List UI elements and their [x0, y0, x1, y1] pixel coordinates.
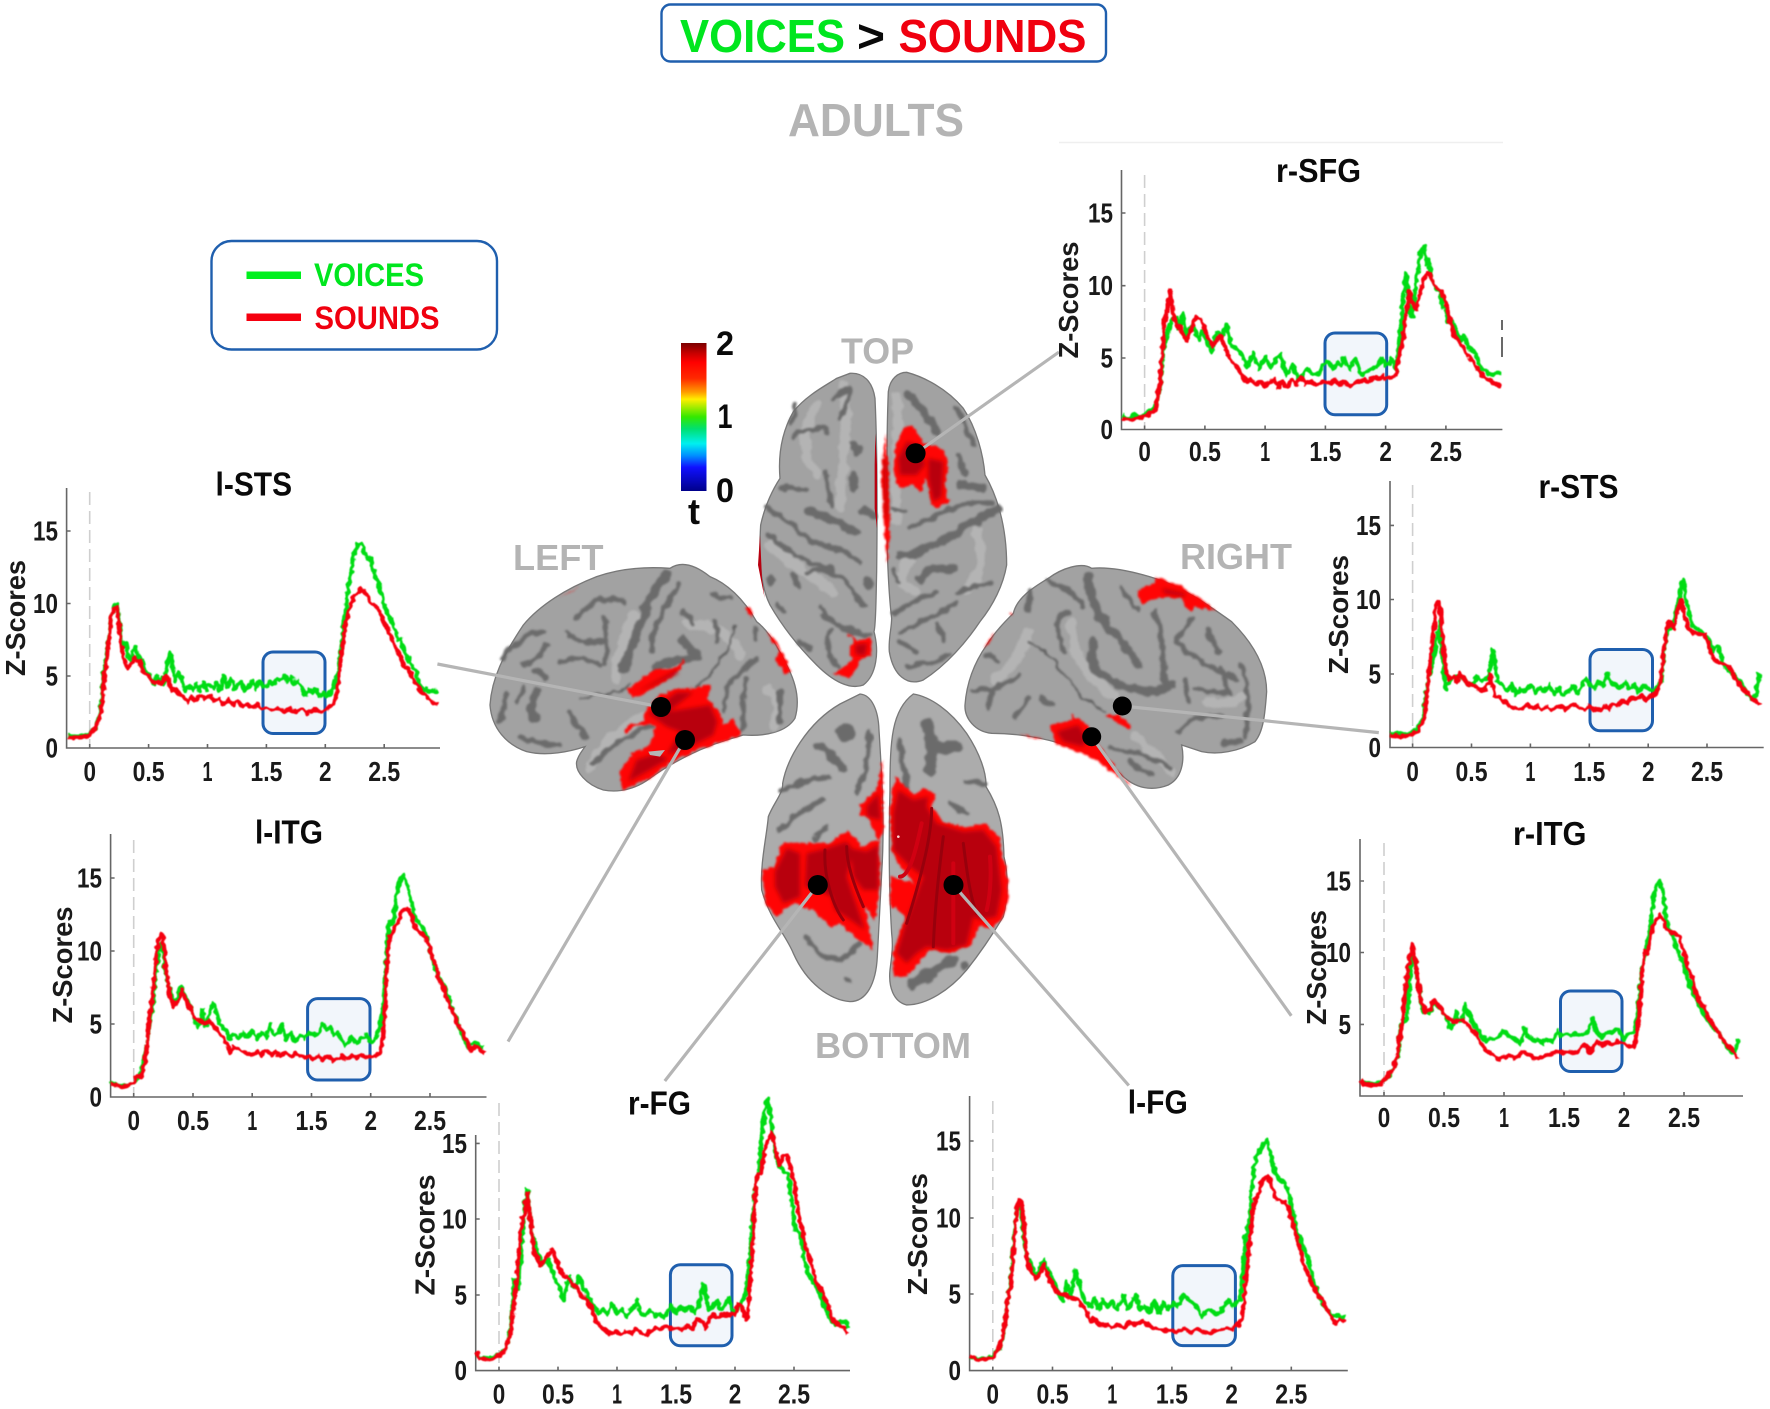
- chart: l-FG: [902, 1084, 1348, 1409]
- axes: [111, 834, 486, 1097]
- tick labels: 1.5: [660, 1379, 692, 1409]
- tick labels: 0: [1368, 732, 1381, 763]
- colour bar: t scale: 2: [716, 325, 734, 363]
- left hemisphere, bottom view: [761, 694, 883, 1002]
- highlight window: [1325, 333, 1387, 415]
- tick labels: 5: [948, 1278, 961, 1310]
- tick labels: 2: [319, 756, 332, 787]
- chart: l-STS: [0, 466, 440, 787]
- tick labels: 5: [1338, 1009, 1351, 1040]
- region markers: [651, 443, 1132, 895]
- tick labels: 1: [1260, 436, 1270, 467]
- colour bar: t scale: [681, 325, 734, 532]
- traces: [1122, 246, 1501, 419]
- axes: [67, 488, 440, 748]
- brain: bottom view: [761, 694, 1008, 1005]
- tick labels: 15: [33, 516, 58, 546]
- tick labels: 0: [46, 732, 58, 764]
- highlight window: [1173, 1266, 1235, 1346]
- tick labels: 15: [77, 862, 102, 894]
- title box: voices > sounds: VOICES: [680, 10, 845, 62]
- tick labels: 2: [729, 1379, 741, 1409]
- y axis label: Z-Scores: [1323, 555, 1354, 674]
- axes: [1390, 481, 1764, 748]
- colour bar: t scale: 0: [716, 472, 734, 510]
- title box: voices > sounds: [662, 4, 1106, 62]
- tick labels: 0: [1100, 414, 1113, 445]
- title box: voices > sounds: >: [857, 10, 885, 62]
- tick labels: 2: [1642, 756, 1654, 787]
- tick labels: 2.5: [1691, 756, 1723, 787]
- highlight window: [263, 652, 325, 734]
- traces: [1361, 880, 1738, 1085]
- legend: [212, 241, 497, 350]
- right hemisphere, bottom view: [889, 694, 1008, 1005]
- legend: SOUNDS: [314, 300, 440, 336]
- chart title: r-ITG: [1513, 815, 1586, 852]
- y axis label: Z-Scores: [1301, 910, 1332, 1025]
- tick labels: 10: [1356, 584, 1381, 615]
- tick labels: [77, 862, 446, 1136]
- tick labels: [33, 516, 400, 787]
- tick labels: [442, 1128, 810, 1409]
- tick labels: 15: [442, 1128, 467, 1159]
- tick labels: 2: [1225, 1379, 1238, 1409]
- title box: voices > sounds: SOUNDS: [898, 10, 1086, 62]
- tick labels: 1.5: [296, 1105, 328, 1136]
- tick labels: 0: [127, 1105, 140, 1136]
- chart: r-ITG: [1301, 815, 1743, 1133]
- colour bar: t scale: t: [688, 491, 700, 532]
- label: left: LEFT: [513, 537, 604, 578]
- label: bottom: BOTTOM: [815, 1025, 971, 1066]
- leader lines: [437, 352, 1379, 1086]
- tick labels: 1: [202, 756, 212, 787]
- tick labels: 0: [493, 1379, 505, 1409]
- tick labels: 0: [1378, 1102, 1390, 1133]
- traces: [111, 875, 484, 1087]
- tick labels: [936, 1126, 1307, 1409]
- brain: left lateral view: [490, 565, 797, 791]
- left hemisphere, top view: [758, 373, 877, 686]
- tick labels: 2.5: [1668, 1102, 1700, 1133]
- tick labels: 1: [1499, 1102, 1509, 1133]
- tick labels: 1: [1107, 1379, 1117, 1409]
- tick labels: 2: [1379, 436, 1392, 467]
- tick labels: 0: [1406, 756, 1419, 787]
- tick labels: 10: [1088, 270, 1113, 301]
- y axis label: Z-Scores: [410, 1174, 440, 1296]
- tick labels: 0: [454, 1355, 467, 1386]
- tick labels: 10: [77, 936, 102, 966]
- tick labels: 15: [1326, 866, 1351, 896]
- tick labels: 1.5: [1573, 756, 1605, 787]
- chart title: l-FG: [1128, 1084, 1188, 1121]
- chart title: r-STS: [1538, 468, 1618, 505]
- brain: top view: [758, 372, 1007, 686]
- chart: r-SFG: [1053, 142, 1503, 467]
- axes: [1122, 170, 1502, 430]
- y axis label: Z-Scores: [1053, 242, 1084, 358]
- tick labels: 5: [454, 1280, 467, 1310]
- traces: [970, 1141, 1345, 1360]
- traces: [1390, 579, 1760, 737]
- axes: [1360, 839, 1743, 1096]
- traces: [477, 1098, 848, 1360]
- tick labels: 10: [33, 588, 58, 619]
- tick labels: 10: [1326, 937, 1351, 968]
- chart: r-STS: [1323, 468, 1764, 787]
- y axis label: Z-Scores: [902, 1173, 933, 1295]
- tick labels: 1.5: [1156, 1379, 1188, 1409]
- tick labels: 0: [948, 1355, 961, 1386]
- tick labels: 5: [90, 1008, 102, 1040]
- tick labels: 0.5: [1456, 756, 1488, 787]
- tick labels: 0.5: [133, 756, 165, 787]
- tick labels: 5: [1368, 658, 1381, 690]
- chart title: r-FG: [628, 1084, 691, 1122]
- tick labels: 1: [612, 1379, 622, 1409]
- tick labels: 2.5: [778, 1379, 810, 1409]
- highlight window: [1560, 991, 1622, 1072]
- highlight window: [670, 1265, 732, 1346]
- heading: adults: ADULTS: [788, 94, 964, 146]
- highlight window: [1590, 650, 1652, 731]
- right hemisphere, top view: [882, 372, 1007, 682]
- tick labels: 15: [1356, 510, 1381, 541]
- tick labels: 0: [83, 756, 96, 787]
- tick labels: 1.5: [1548, 1102, 1580, 1133]
- y axis label: Z-Scores: [0, 560, 31, 676]
- tick labels: [1356, 510, 1723, 787]
- legend: VOICES: [314, 257, 424, 293]
- tick labels: 15: [936, 1126, 961, 1156]
- tick labels: 0.5: [1036, 1379, 1068, 1409]
- tick labels: 2.5: [1430, 436, 1462, 467]
- label: right: RIGHT: [1180, 536, 1292, 577]
- brain: right lateral view: [965, 566, 1267, 788]
- axes: [476, 1135, 850, 1371]
- tick labels: 5: [1100, 342, 1113, 374]
- tick labels: 10: [442, 1204, 467, 1234]
- chart title: l-ITG: [255, 814, 323, 850]
- tick labels: 1: [247, 1105, 257, 1136]
- tick labels: 1: [1525, 756, 1535, 787]
- tick labels: 0: [987, 1379, 999, 1409]
- chart title: r-SFG: [1276, 152, 1361, 189]
- tick labels: 0.5: [1189, 436, 1221, 467]
- y axis label: Z-Scores: [47, 906, 78, 1024]
- colour bar: t scale: 1: [718, 398, 732, 436]
- tick labels: 2: [1618, 1102, 1630, 1133]
- tick labels: 1.5: [1309, 436, 1341, 467]
- highlight window: [308, 999, 370, 1080]
- tick labels: 0: [1138, 436, 1151, 467]
- tick labels: 2.5: [368, 756, 400, 787]
- tick labels: 0.5: [1428, 1102, 1460, 1133]
- tick labels: 2.5: [1275, 1379, 1307, 1409]
- tick labels: 2: [364, 1105, 377, 1136]
- tick labels: 10: [936, 1202, 961, 1234]
- chart title: l-STS: [216, 466, 292, 502]
- axes: [970, 1096, 1348, 1371]
- tick labels: 1.5: [250, 756, 282, 787]
- tick labels: 2.5: [414, 1105, 446, 1136]
- chart: r-FG: [410, 1084, 850, 1409]
- tick labels: 0: [90, 1082, 102, 1112]
- traces: [67, 544, 438, 738]
- label: top: TOP: [841, 330, 914, 372]
- tick labels: 15: [1088, 198, 1113, 228]
- tick labels: [1088, 198, 1462, 467]
- tick labels: [1326, 866, 1700, 1133]
- tick labels: 0.5: [542, 1379, 574, 1409]
- chart: l-ITG: [47, 814, 486, 1136]
- tick labels: 5: [46, 660, 58, 692]
- tick labels: 0.5: [177, 1105, 209, 1136]
